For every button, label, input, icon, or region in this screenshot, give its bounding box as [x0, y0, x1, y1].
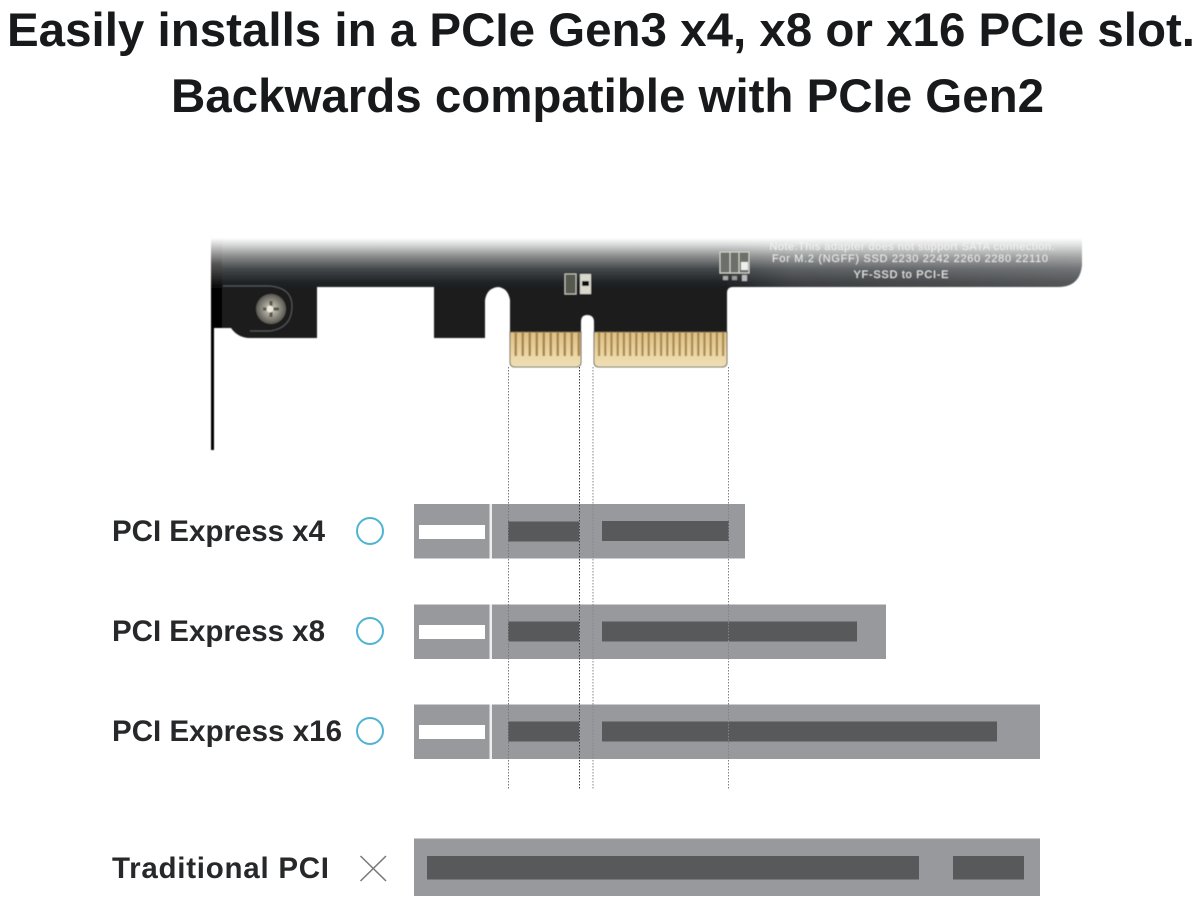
silkscreen text [770, 241, 1054, 281]
gold fingers long [594, 332, 727, 367]
alignment guide lines [508, 367, 728, 790]
slot x4 [414, 504, 745, 558]
adapter card PCB [211, 238, 1082, 450]
title: Backwards compatible with PCIe Gen2 [171, 70, 1044, 123]
silkscreen text: Note:This adapter does not support SATA connection. [770, 241, 1054, 253]
jumper block [720, 252, 749, 281]
icon: circle compatible [357, 518, 383, 544]
slot x16 [414, 704, 1040, 759]
row: PCI Express x4 [112, 504, 745, 558]
circuit board [222, 238, 1082, 367]
icon: circle compatible [357, 618, 383, 644]
gold fingers short [510, 332, 581, 367]
bracket strip [211, 238, 222, 450]
LED components [565, 274, 591, 294]
row: PCI Express x8 [112, 604, 886, 659]
row: Traditional PCI [112, 838, 1040, 896]
screw [223, 286, 292, 331]
slot x8 [414, 604, 886, 659]
slot traditional [414, 838, 1040, 896]
silkscreen text: For M.2 (NGFF) SSD 2230 2242 2260 2280 22110 [772, 253, 1048, 265]
icon: cross incompatible [360, 856, 386, 881]
title: Easily installs in a PCIe Gen3 x4, x8 or x16 PCIe slot. [7, 4, 1195, 57]
silkscreen text: YF-SSD to PCI-E [854, 269, 948, 281]
row: PCI Express x16 [112, 704, 1040, 759]
title [7, 4, 1195, 123]
label: PCI Express x4 [112, 515, 326, 548]
label: Traditional PCI [112, 852, 329, 885]
label: PCI Express x8 [112, 615, 325, 648]
icon: circle compatible [357, 718, 383, 744]
label: PCI Express x16 [112, 715, 342, 748]
